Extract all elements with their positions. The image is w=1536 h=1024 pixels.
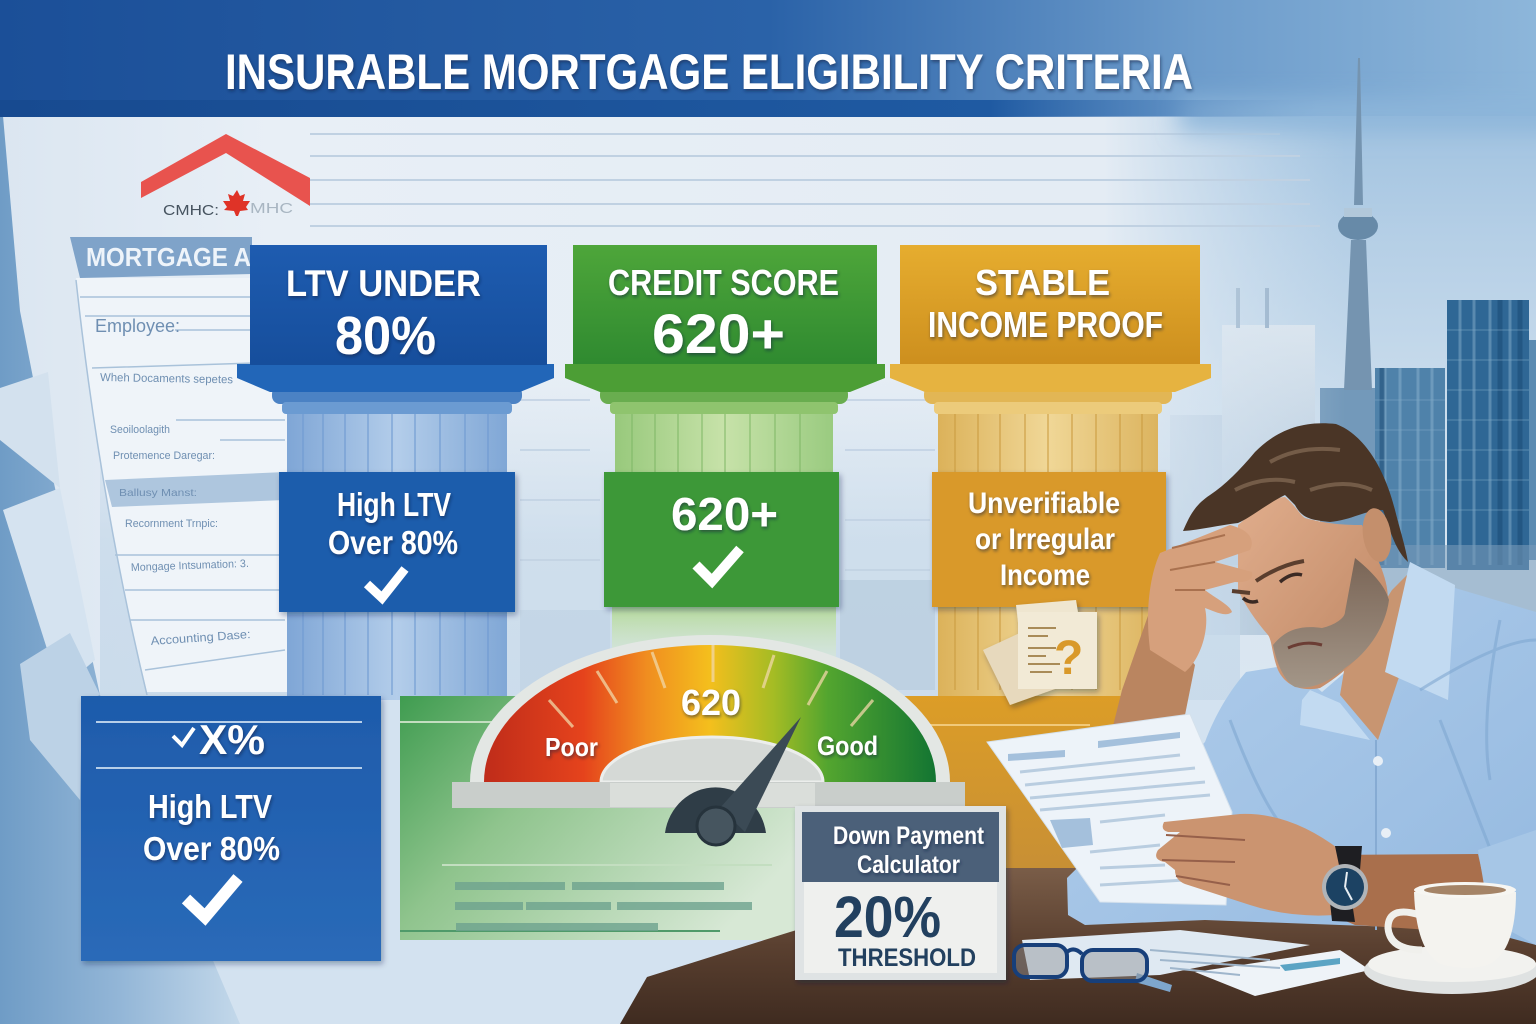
icon: documents with question mark: ?: [1054, 632, 1083, 685]
icon: check mark: [367, 569, 405, 598]
credit score gauge: Poor: [545, 732, 598, 762]
holding hand: [1156, 814, 1340, 916]
face: [1238, 497, 1388, 689]
down payment calculator card: THRESHOLD: [838, 944, 976, 972]
card: 620+: [604, 472, 839, 607]
credit score gauge: [452, 635, 965, 845]
ear: [1359, 506, 1395, 564]
credit score gauge: Good: [817, 731, 878, 761]
card: high LTV over 80%: [279, 472, 515, 612]
card: high LTV over 80%: High LTV: [337, 486, 451, 523]
card: 620+: 620+: [671, 488, 778, 540]
icon: coffee cup and saucer: [1364, 882, 1536, 994]
gauge base bar: [452, 782, 965, 808]
credit score gauge: 620: [681, 682, 741, 723]
CMHC logo: [141, 134, 310, 219]
title: INSURABLE MORTGAGE ELIGIBILITY CRITERIA: [225, 44, 1193, 100]
mortgage application form: Wheh Docaments sepetes: [100, 372, 233, 386]
illustration: stressed man: [987, 423, 1536, 945]
pillar header: LTV under 80%: LTV UNDER: [286, 263, 481, 304]
down payment calculator card: Calculator: [857, 851, 960, 879]
sleeve cuff: [1478, 830, 1536, 945]
card: unverifiable or irregular income: Income: [1000, 559, 1090, 592]
paper held by man: [987, 714, 1232, 905]
gauge outer rim: [470, 635, 950, 782]
eyes and brows: [1232, 561, 1304, 593]
raised forearm: [1113, 610, 1195, 726]
bottom panel: high LTV over 80%: [81, 696, 381, 961]
collar: [1300, 562, 1455, 740]
title banner: [0, 0, 1536, 130]
pillar header: credit score 620+: 620+: [652, 302, 785, 365]
icon: small check mark: [173, 728, 194, 745]
pillar header: LTV under 80%: [250, 245, 547, 366]
mortgage application form: Accounting Dase:: [150, 627, 251, 648]
bottom panel: high LTV over 80%: Over 80%: [143, 830, 280, 867]
down payment calculator card: 20%: [834, 885, 941, 950]
icon: maple leaf: [223, 190, 250, 216]
mortgage application form: Seoiloolagith: [110, 424, 170, 436]
mortgage application form: Recornment Trnpic:: [125, 518, 218, 530]
card: unverifiable or irregular income: or Irregular: [975, 523, 1115, 556]
pillar header: stable income proof: INCOME PROOF: [928, 304, 1163, 345]
skyline background: [1000, 0, 1536, 680]
bottom panel: income: [880, 696, 1140, 876]
icon: eyeglasses: [1014, 945, 1147, 981]
mortgage application form: Ballusy Manst:: [119, 487, 197, 499]
pillar header: credit score 620+: [573, 245, 877, 365]
raised hand: [1148, 525, 1252, 672]
CMHC logo: CMHC:: [163, 202, 219, 219]
card: unverifiable or irregular income: Unverifiable: [968, 487, 1120, 520]
bottom panel: high LTV over 80%: X%: [199, 716, 265, 763]
background paper sheet: [0, 116, 1345, 1024]
icon: check mark: [696, 549, 740, 581]
pillar header: credit score 620+: CREDIT SCORE: [608, 262, 839, 303]
gauge inner dial: [601, 737, 823, 782]
CMHC logo: MHC: [250, 200, 293, 217]
card: high LTV over 80%: Over 80%: [328, 524, 458, 561]
icon: check mark: [186, 878, 238, 917]
bottom panel: high LTV over 80%: High LTV: [148, 788, 272, 825]
pillar header: stable income proof: STABLE: [975, 262, 1110, 303]
pillar: LTV under 80%: [237, 245, 554, 700]
right forearm: [1320, 854, 1488, 930]
desk papers: [1022, 930, 1370, 996]
desk: [620, 868, 1536, 1024]
icon: red roof: [141, 134, 310, 206]
card: unverifiable or irregular income: [932, 472, 1166, 607]
mortgage application form: Mongage Intsumation: 3.: [131, 558, 249, 574]
bottom panel: credit report: [400, 696, 820, 940]
beard: [1273, 558, 1389, 688]
pillar header: LTV under 80%: 80%: [335, 306, 436, 366]
pillar: credit score 620+: [565, 245, 885, 657]
mortgage application form: [70, 237, 300, 695]
hair: [1183, 423, 1408, 562]
neck: [1340, 570, 1428, 740]
mortgage application form: Protemence Daregar:: [113, 450, 215, 462]
wristwatch: [1322, 846, 1368, 922]
pillar header: stable income proof: [900, 245, 1200, 364]
down payment calculator card: Down Payment: [833, 822, 985, 850]
gauge colour arc: [484, 645, 936, 782]
mortgage application form: Employee:: [95, 316, 180, 336]
pillar: stable income proof: [890, 245, 1211, 700]
down payment calculator card: [795, 806, 1006, 980]
icon: documents with question mark: [983, 600, 1097, 705]
gauge needle: [665, 717, 801, 845]
shirt: [1067, 562, 1536, 945]
icon: CN Tower: [1338, 58, 1378, 390]
mortgage application form: MORTGAGE A: [86, 242, 251, 272]
